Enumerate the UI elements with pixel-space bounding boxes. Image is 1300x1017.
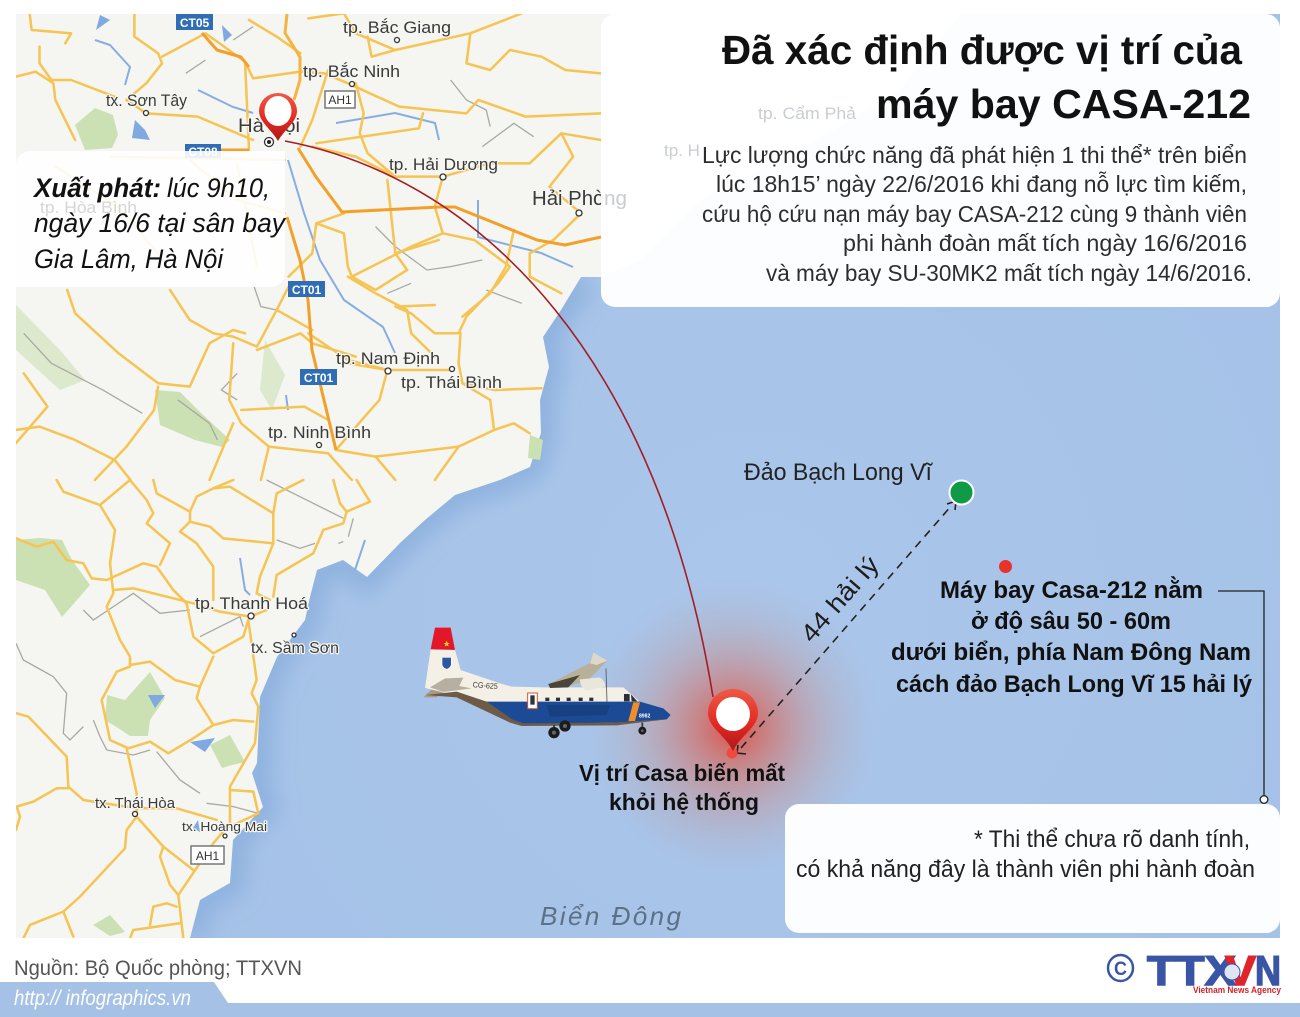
- map place labels: Hải Phòng: [532, 188, 627, 210]
- red glow around disappearance point: [607, 602, 858, 854]
- map place labels: Hà Nội: [238, 116, 300, 137]
- callout: plane depth: cách đảo Bạch Long Vĩ 15 hải lý: [896, 671, 1253, 698]
- icon: plane: CG-625: [473, 680, 499, 691]
- callout: plane depth: ở độ sâu 50 - 60m: [971, 608, 1171, 635]
- panel: footnote: [785, 804, 1280, 933]
- disappearance label: Vị trí Casa biến mất: [579, 760, 785, 786]
- panel: departure: tp. Hòa Bình: [40, 198, 137, 217]
- map place labels: tx. Hoàng Mai: [182, 819, 267, 834]
- panel: departure: lúc 9h10,: [167, 173, 270, 203]
- distance dashed arrow: [737, 501, 956, 754]
- map place labels: tp. Bắc Giang: [343, 18, 451, 37]
- highway shields: [176, 14, 337, 385]
- icon: red crash dot: [999, 560, 1012, 573]
- summary text: lúc 18h15’ ngày 22/6/2016 khi đang nỗ lực tìm kiếm,: [716, 171, 1247, 197]
- logo: TTXVN: [1108, 947, 1281, 995]
- map place labels: tx. Thái Hòa: [95, 795, 176, 812]
- flight path arc: [285, 141, 713, 697]
- land: [16, 14, 614, 938]
- logo: TTXVN: Vietnam News Agency: [1193, 985, 1281, 995]
- icon: Hanoi pin: [259, 93, 297, 141]
- map place labels: tp. Thanh Hoá: [195, 594, 309, 613]
- map place labels: tp. Thái Bình: [401, 373, 502, 392]
- distance label: 44 hải lý: [795, 551, 885, 648]
- faint map labels under panel: [604, 104, 857, 210]
- callout leader line: [1218, 591, 1268, 803]
- map: AH1: [196, 849, 219, 863]
- panel: departure: Gia Lâm, Hà Nội: [34, 244, 224, 274]
- forest patches: [16, 108, 543, 936]
- icon: green island dot: [950, 480, 974, 504]
- panel: departure: Xuất phát:: [32, 173, 161, 203]
- logo: TTXVN: V: [1225, 947, 1256, 994]
- city markers: [132, 38, 582, 838]
- highway shields: CT01: [292, 283, 321, 297]
- panel: footnote: có khả năng đây là thành viên phi hành đoàn: [796, 856, 1255, 883]
- road network: [16, 13, 601, 480]
- icon: plane: 8982: [639, 714, 650, 720]
- website: http:// infographics.vn: [14, 987, 191, 1010]
- sea name: Biển Đông: [540, 901, 682, 931]
- summary text: Lực lượng chức năng đã phát hiện 1 thi thể* trên biển: [702, 142, 1247, 168]
- disappearance label: khỏi hệ thống: [609, 789, 759, 815]
- source: Nguồn: Bộ Quốc phòng; TTXVN: [14, 957, 302, 980]
- highway shields: CT05: [180, 16, 209, 30]
- map place labels: tp. Nam Định: [336, 349, 440, 368]
- panel: footnote: * Thi thể chưa rõ danh tính,: [974, 826, 1250, 853]
- mountain tracks: [16, 480, 353, 813]
- disappearance label: [579, 760, 785, 815]
- icon: disappearance pin: [708, 689, 758, 758]
- panel: summary: [601, 14, 1280, 307]
- map place labels: [95, 18, 627, 834]
- water bodies and rivers: [95, 40, 573, 595]
- logo: TTXVN: C: [1114, 959, 1127, 980]
- map place labels: tp. Bắc Ninh: [303, 62, 400, 81]
- panel: departure: [16, 151, 286, 287]
- highways: [202, 14, 601, 450]
- panel: departure: ngày 16/6 tại sân bay: [34, 208, 286, 238]
- map place labels: tx. Sầm Sơn: [251, 640, 339, 657]
- logo: TTXVN: TTX: [1147, 947, 1236, 994]
- title: Đã xác định được vị trí của: [722, 27, 1243, 73]
- icon: plane: [423, 628, 671, 738]
- map place labels: tx. Sơn Tây: [106, 91, 187, 110]
- callout: plane depth: [891, 576, 1253, 698]
- map: AH1: [328, 93, 352, 107]
- title: [722, 27, 1251, 127]
- summary text: phi hành đoàn mất tích ngày 16/6/2016: [843, 230, 1247, 256]
- map place labels: tp. Hải Dương: [389, 155, 498, 174]
- faint map labels under panel: ng: [604, 188, 627, 210]
- callout: plane depth: Máy bay Casa-212 nằm: [940, 576, 1203, 604]
- map place labels: tp. Ninh Bình: [268, 423, 371, 442]
- summary text: và máy bay SU-30MK2 mất tích ngày 14/6/2016.: [766, 260, 1252, 286]
- summary text: [702, 142, 1252, 286]
- callout: plane depth: dưới biển, phía Nam Đông Nam: [891, 639, 1251, 666]
- island label: Đảo Bạch Long Vĩ: [744, 459, 933, 486]
- summary text: cứu hộ cứu nạn máy bay CASA-212 cùng 9 thành viên: [702, 201, 1247, 227]
- title: máy bay CASA-212: [876, 81, 1251, 127]
- sea background: [190, 14, 1280, 938]
- faint map labels under panel: tp. H: [664, 141, 700, 160]
- faint map labels under panel: tp. Cẩm Phả: [758, 104, 857, 123]
- highway shields: CT01: [304, 371, 333, 385]
- logo: TTXVN: N: [1255, 947, 1281, 994]
- footer band: [0, 982, 1300, 1017]
- highway shields: CT08: [188, 145, 218, 159]
